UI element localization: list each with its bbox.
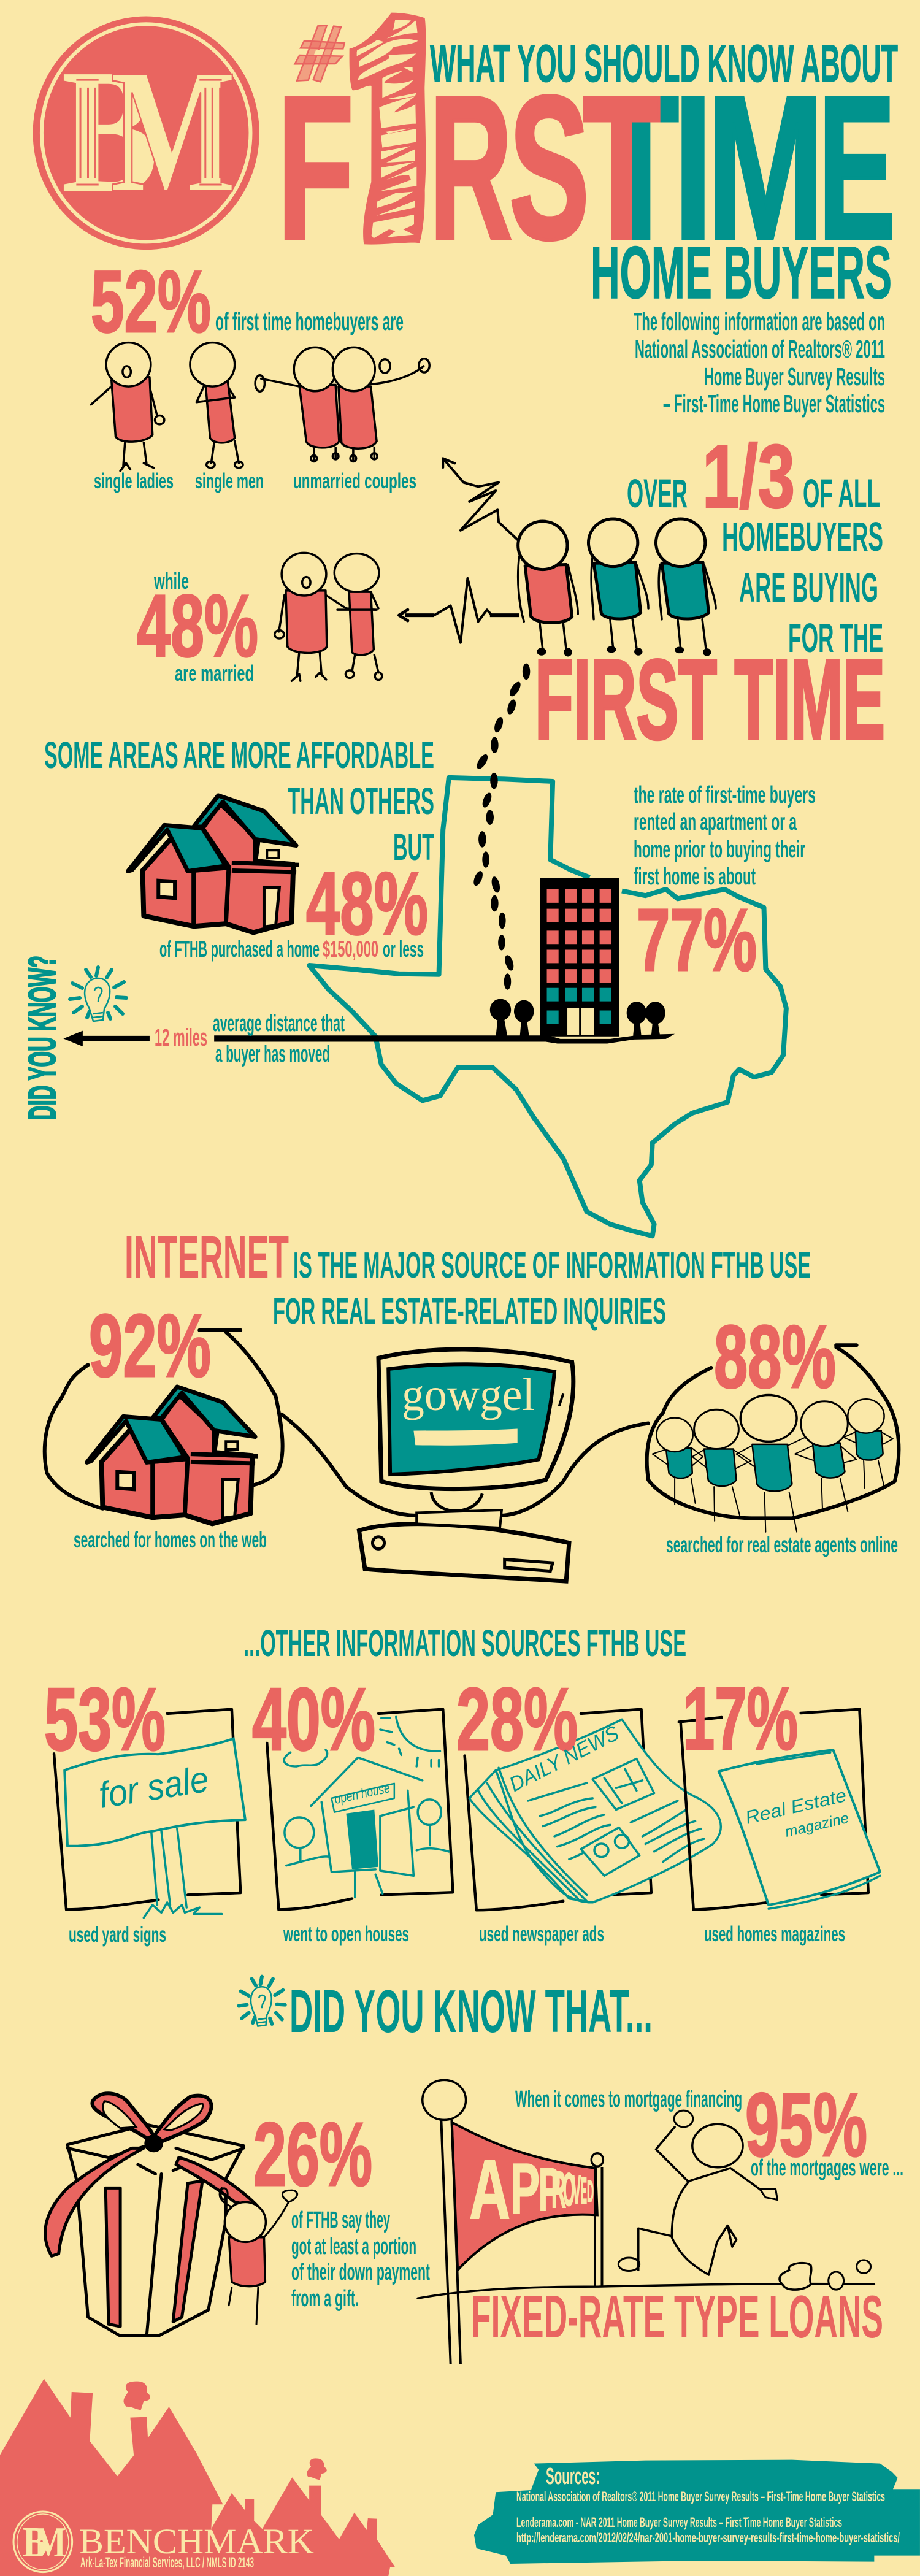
icon: BM logo badge: M [110, 33, 236, 229]
title: FIRST TIME large lettering [277, 54, 895, 282]
stat: 88 percent searched for agents [666, 1307, 898, 1557]
text block: rate of first time buyers who rented [634, 782, 816, 890]
panel: yard signs [44, 1669, 245, 1947]
icon: married couple figures [275, 553, 382, 681]
label: gowgel search logo: gowgel [402, 1369, 535, 1420]
icon: desktop computer [359, 1349, 573, 1581]
stat: 95 percent fixed rate mortgages: When it comes to mortgage financing [515, 2087, 742, 2112]
title: FIRST TIME large lettering: I [673, 54, 713, 282]
heading: did you know that [239, 1977, 653, 2045]
heading: affordability: SOME AREAS ARE MORE AFFORDABLE [44, 734, 434, 776]
stat: over one third of all homebuyers [535, 426, 885, 762]
labels: figure captions: unmarried couples [293, 469, 416, 493]
stat: 26 percent gift: got at least a portion [291, 2234, 416, 2260]
stat: 48 percent purchased under 150000: or less [383, 937, 424, 962]
text block: rate of first time buyers who rented: rented an apartment or a [634, 809, 797, 835]
map: outline of Texas [309, 778, 786, 1236]
stat: over one third of all homebuyers: 1/3 [702, 426, 795, 526]
icon: BM logo badge: B [61, 33, 158, 229]
title: FIRST TIME large lettering: R [429, 54, 512, 282]
stat: 52 percent: 52% [91, 253, 211, 351]
labels: figure captions: single ladies [94, 469, 174, 493]
panel: homes magazines: magazine [783, 1810, 851, 1841]
stat: 92 percent searched for homes [74, 1296, 267, 1552]
panel: newspaper ads [456, 1669, 721, 1946]
icon: approved flag: E [581, 2171, 587, 2211]
stat: 48 percent married [137, 569, 258, 686]
stat: 48 percent purchased under 150000: of FTHB purchased a home [159, 937, 320, 962]
icon: approved flag: V [572, 2167, 581, 2212]
text block: data source note [634, 307, 885, 418]
callout: did you know 12 miles [21, 956, 345, 1120]
stat: 92 percent searched for homes: 92% [89, 1296, 211, 1395]
title: FIRST TIME large lettering: F [277, 54, 354, 282]
heading: affordability: BUT [393, 826, 434, 868]
stat: 77 percent: 77% [637, 891, 757, 989]
panel: sources [474, 2460, 920, 2564]
title: FIRST TIME large lettering: M [707, 54, 824, 282]
icon: approved flag: O [563, 2164, 575, 2215]
panel: open houses: 40% [252, 1669, 375, 1769]
stat: 48 percent married: while [153, 569, 189, 594]
stat: 26 percent gift: from a gift. [291, 2286, 359, 2312]
stat: 48 percent married: 48% [137, 577, 258, 675]
stat: 48 percent purchased under 150000: 48% [306, 854, 428, 953]
icon: gift box with ribbon [45, 2093, 258, 2336]
stat: 48 percent married: are married [175, 661, 254, 686]
icon: hand drawn hash sign and numeral one [295, 13, 426, 245]
icon: single lady, single man, unmarried couple figures [91, 343, 429, 471]
stat: 26 percent gift [253, 2104, 430, 2312]
panel: newspaper ads: used newspaper ads [479, 1922, 604, 1946]
icon: house with teal roof [128, 795, 299, 932]
icon: approved flag: A [469, 2142, 510, 2237]
title: FIRST TIME large lettering: S [509, 54, 589, 282]
footer: benchmark house silhouette and logo [0, 2379, 395, 2576]
stat: 48 percent purchased under 150000 [159, 854, 428, 962]
title: FIRST TIME large lettering: T [583, 54, 661, 282]
icon: approved flag: D [587, 2174, 594, 2209]
panel: open houses: went to open houses [283, 1922, 409, 1946]
title: FIRST TIME large lettering: T [601, 54, 679, 282]
panel: homes magazines: Real Estate [743, 1785, 848, 1828]
icon: person receiving gift [220, 2188, 297, 2324]
stat: over one third of all homebuyers: OVER [627, 470, 688, 516]
callout: did you know 12 miles: a buyer has moved [215, 1041, 330, 1067]
stat: 52 percent [91, 253, 404, 351]
stat: 26 percent gift: of FTHB say they [291, 2207, 390, 2233]
stat: 48 percent purchased under 150000: $150,000 [323, 937, 378, 962]
labels: figure captions [94, 469, 416, 493]
icon: approved flag: P [510, 2149, 540, 2229]
callout: did you know 12 miles: 12 miles [155, 1024, 207, 1051]
stat: 95 percent fixed rate mortgages [471, 2075, 903, 2350]
panel: newspaper ads: DAILY NEWS [505, 1722, 623, 1796]
icon: group of five agents [653, 1395, 893, 1532]
callout: did you know 12 miles: average distance that [213, 1011, 345, 1037]
panel: homes magazines [679, 1669, 880, 1946]
panel: yard signs: used yard signs [69, 1923, 166, 1947]
panel: sources: Sources: [546, 2464, 600, 2490]
stat: 52 percent: of first time homebuyers are [215, 307, 404, 335]
icon: speech bubble with cables to computer [45, 1330, 899, 1518]
footer: benchmark house silhouette and logo: BENCHMARK [79, 2521, 314, 2561]
icon: approved flag: R [551, 2161, 566, 2218]
heading: affordability: THAN OTHERS [288, 780, 434, 822]
panel: yard signs: for sale [96, 1758, 212, 1816]
footer: benchmark house silhouette and logo: M [34, 2519, 66, 2566]
panel: open houses [252, 1669, 453, 1946]
arrow: soundwave arrow to married couple [399, 578, 519, 643]
heading: internet is the major source [125, 1224, 811, 1332]
icon: apartment building with trees and street [214, 878, 675, 1044]
heading: affordability [44, 734, 434, 868]
footer: benchmark house silhouette and logo: B [23, 2519, 47, 2566]
stat: 88 percent searched for agents: 88% [714, 1307, 836, 1406]
icon: approved flag: P [539, 2155, 561, 2223]
footer: benchmark house silhouette and logo: Ark-La-Tex Financial Services, LLC / NMLS ID 2143 [80, 2555, 254, 2571]
panel: yard signs: 53% [44, 1669, 166, 1769]
icon: footprints trail [472, 664, 530, 990]
panel: homes magazines: 17% [683, 1669, 798, 1768]
icon: house searched on the web [87, 1387, 258, 1524]
icon: three first time buyers with arrows [443, 458, 716, 657]
stat: 26 percent gift: 26% [253, 2104, 372, 2205]
stat: 92 percent searched for homes: searched for homes on the web [74, 1527, 267, 1552]
stat: 26 percent gift: of their down payment [291, 2260, 430, 2285]
panel: newspaper ads: 28% [456, 1669, 578, 1769]
heading: internet is the major source: INTERNET [125, 1224, 289, 1290]
icon: BM logo badge [33, 17, 259, 250]
text block: rate of first time buyers who rented: first home is about [634, 864, 756, 890]
icon: light bulb [70, 967, 126, 1021]
callout: did you know 12 miles: DID YOU KNOW? [21, 956, 64, 1120]
labels: figure captions: single men [195, 469, 264, 493]
panel: open houses: open house [333, 1780, 391, 1807]
icon: running person with ground and flowers [418, 2110, 874, 2298]
icon: approved flag [423, 2080, 603, 2364]
